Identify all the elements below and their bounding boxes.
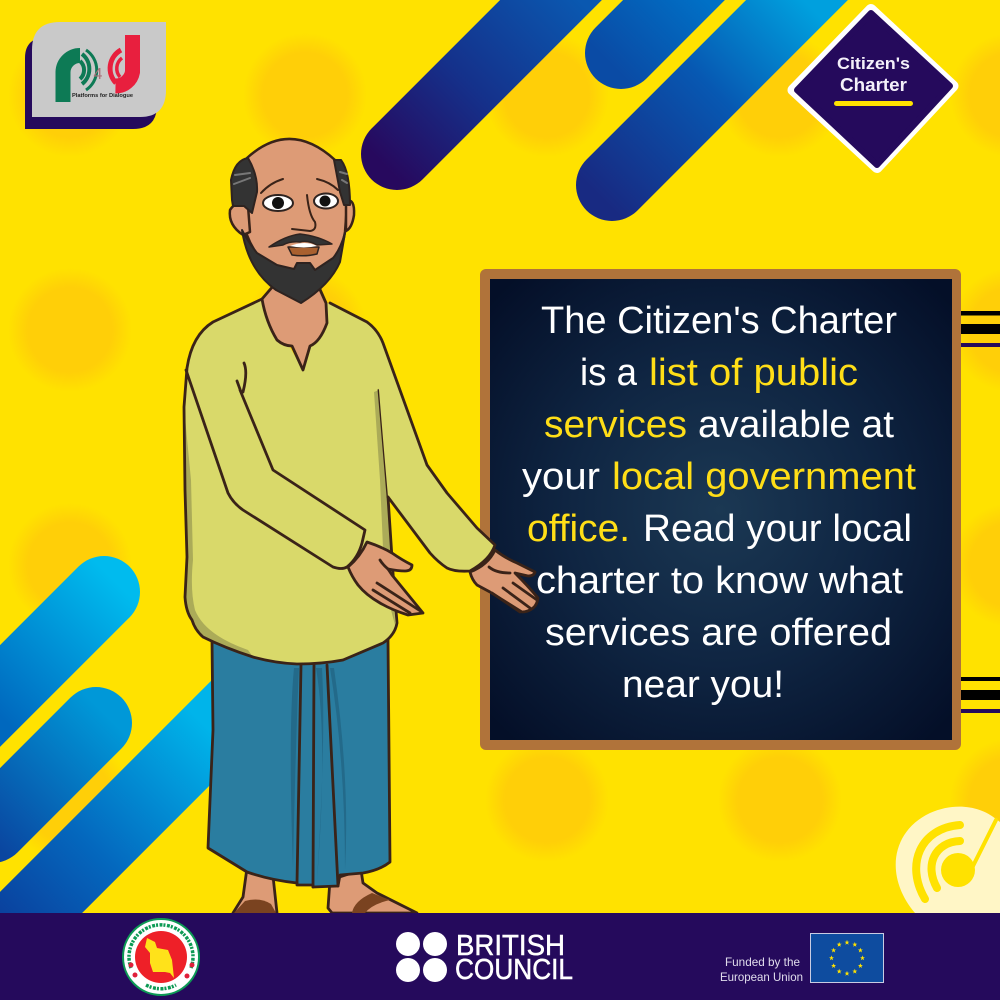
logo: British Council	[396, 930, 573, 986]
neck	[262, 285, 327, 370]
illustration: man presenting	[184, 139, 538, 913]
text: charter description: charter to know what	[536, 560, 903, 602]
ears	[230, 204, 250, 235]
text: charter description: services are offered	[545, 612, 892, 654]
side stripes: lower	[958, 677, 1000, 713]
text: charter description: Read your local	[643, 508, 912, 550]
text: charter description: The Citizen's Charter	[541, 300, 897, 342]
badge: Citizen's Charter: Citizen's	[837, 54, 910, 73]
logo: British Council: COUNCIL	[455, 954, 573, 986]
logo: Bangladesh government seal	[123, 919, 199, 995]
hair	[231, 158, 257, 213]
text: charter description: available at	[698, 404, 894, 446]
panel: p4d logo	[25, 22, 166, 129]
text: charter description	[522, 300, 916, 706]
text: charter description: is a	[580, 352, 638, 394]
diagonal stripes: top	[397, 0, 850, 185]
badge: Citizen's Charter	[793, 10, 953, 168]
text: funded by: European Union	[720, 970, 803, 984]
left sleeve lines	[186, 363, 365, 568]
logo: British Council: BRITISH	[456, 930, 565, 962]
legs and sandals	[233, 868, 417, 913]
text: charter description: list of public	[649, 352, 858, 394]
badge: Citizen's Charter: Charter	[840, 75, 907, 95]
lungi	[208, 640, 390, 887]
text: funded by	[720, 955, 803, 984]
eyes	[263, 195, 293, 211]
text: charter description: office.	[527, 508, 630, 550]
panel: blackboard	[480, 269, 961, 750]
mouth	[288, 247, 319, 256]
brows and nose	[261, 179, 338, 231]
right sleeve	[330, 303, 495, 571]
watermark: music note logo	[896, 807, 1000, 913]
text: charter description: local government	[612, 456, 916, 498]
text: charter description: your	[522, 456, 600, 498]
icon: EU flag	[810, 934, 884, 982]
side stripes: upper	[958, 311, 1000, 347]
text: funded by: Funded by the	[725, 955, 800, 969]
hands	[348, 542, 538, 615]
footer band	[0, 913, 1000, 1000]
text: charter description: near you!	[622, 664, 784, 706]
head	[230, 139, 354, 303]
beard	[242, 230, 345, 303]
diagonal stripes: bottom left	[0, 592, 250, 974]
panel: p4d logo: 4	[94, 66, 103, 83]
shirt	[184, 299, 495, 664]
moustache	[269, 234, 332, 247]
text: charter description: services	[544, 404, 687, 446]
panel: p4d logo: Platforms for Dialogue	[72, 93, 133, 99]
